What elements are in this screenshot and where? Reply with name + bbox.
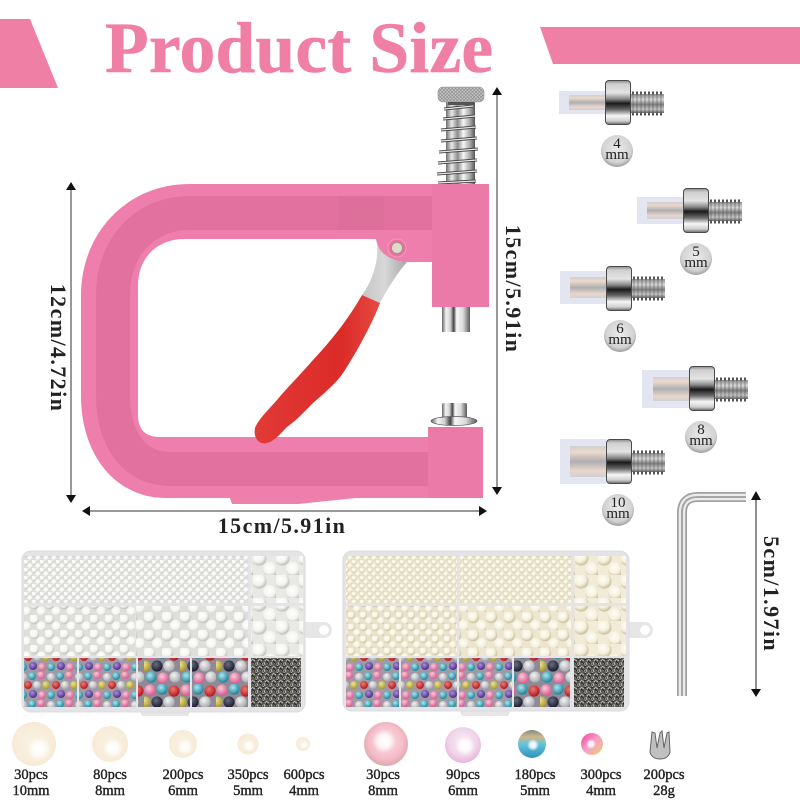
lower piston [442, 305, 470, 332]
screw with knurled head and spring [437, 87, 484, 186]
storage tray: white pearls [22, 551, 332, 716]
pin: 4mm [559, 80, 664, 167]
metal prong setting: 200pcs [643, 767, 685, 783]
bead: 8mm rainbow: 30pcs [366, 767, 400, 783]
hex key [682, 497, 746, 696]
pin: 8mm: 8 [697, 422, 705, 438]
dimension: tool width: 15cm/5.91in [218, 513, 346, 538]
bead: 10mm ivory: 10mm [12, 783, 50, 799]
red handle grip [255, 295, 380, 443]
pink frame [81, 184, 489, 498]
bead: 8mm ivory: 8mm [95, 783, 126, 799]
decorative banner: top right [540, 27, 800, 64]
bead: 8mm rainbow: 8mm [368, 783, 399, 799]
lower die [431, 403, 477, 426]
bead: 10mm ivory [12, 722, 56, 799]
bead: 4mm ivory: 600pcs [283, 767, 325, 783]
metal prong setting: 28g [653, 783, 675, 799]
bead: 5mm ivory [227, 734, 269, 799]
dimension: tool width [82, 506, 487, 538]
dimension: tool height: 15cm/5.91in [501, 225, 526, 353]
pin: 5mm [637, 188, 742, 275]
pivot rivet [388, 239, 406, 257]
bead: 4mm rainbow: 4mm [586, 783, 617, 799]
bead: 6mm rainbow: 6mm [448, 783, 479, 799]
bead: 5mm ivory: 350pcs [227, 767, 269, 783]
pin: 6mm: 6 [616, 321, 624, 337]
bead: 8mm rainbow [364, 722, 408, 799]
title: Product Size [105, 9, 493, 88]
pin: 6mm [560, 266, 665, 352]
decorative banner: top left [0, 19, 58, 88]
pin: 6mm: mm [608, 332, 632, 348]
bead: 6mm ivory: 6mm [168, 783, 199, 799]
pin: 10mm [560, 439, 665, 526]
pin: 8mm [642, 366, 748, 453]
beading tool illustration [81, 87, 489, 504]
bead: 10mm ivory: 30pcs [14, 767, 48, 783]
bead: 5mm rainbow [514, 730, 556, 799]
bead: 4mm rainbow: 300pcs [580, 767, 622, 783]
bead: 6mm ivory [162, 730, 204, 799]
bead: 6mm rainbow [445, 727, 481, 799]
pin: 10mm: mm [606, 506, 630, 522]
metal prong setting [643, 731, 685, 799]
bead: 5mm ivory: 5mm [233, 783, 264, 799]
pin: 5mm: 5 [692, 244, 700, 260]
storage tray: ivory pearls [343, 551, 653, 716]
dimension: tool height [492, 87, 526, 495]
bead: 5mm rainbow: 180pcs [514, 767, 556, 783]
dimension: hex key length: 5cm/1.97in [759, 536, 784, 652]
bead: 4mm ivory [283, 737, 325, 799]
dimension: frame height: 12cm/4.72in [46, 284, 71, 412]
frame base tab [228, 490, 356, 504]
bead: 4mm rainbow [580, 733, 622, 799]
pin: 4mm: 4 [613, 136, 621, 152]
pin: 4mm: mm [605, 147, 629, 163]
pin: 8mm: mm [689, 433, 713, 449]
bead: 6mm ivory: 200pcs [162, 767, 204, 783]
pin: 5mm: mm [684, 255, 708, 271]
pin: 10mm: 10 [610, 495, 626, 511]
dimension: hex key length [751, 491, 784, 697]
lever handle metal [362, 241, 407, 303]
bead: 6mm rainbow: 90pcs [446, 767, 480, 783]
bead: 8mm ivory [92, 726, 128, 799]
bead: 8mm ivory: 80pcs [93, 767, 127, 783]
bead: 5mm rainbow: 5mm [520, 783, 551, 799]
dimension: frame height [46, 182, 76, 503]
bead: 4mm ivory: 4mm [289, 783, 320, 799]
